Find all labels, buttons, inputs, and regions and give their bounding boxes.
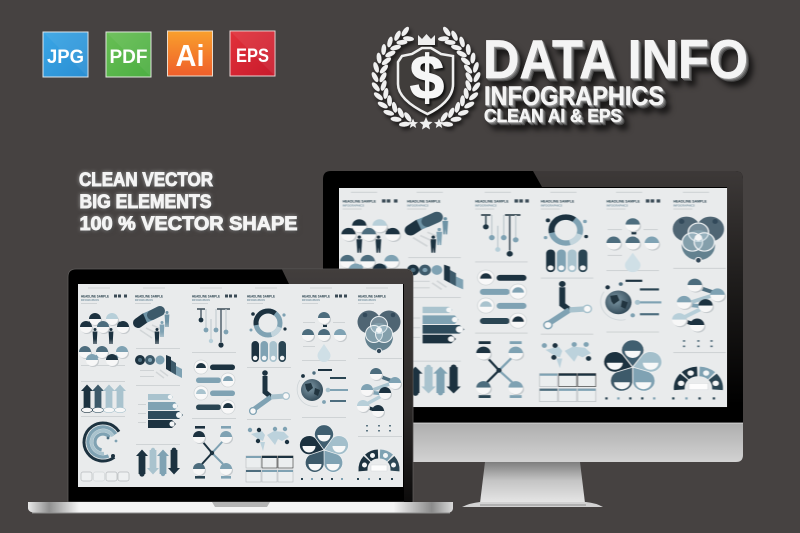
monitor	[323, 171, 743, 507]
headlines: INFOGRAPHICS	[407, 203, 429, 207]
tagline text: CLEAN VECTOR	[79, 170, 213, 191]
shield	[398, 48, 453, 114]
monitor chin	[323, 423, 743, 462]
monitor stand	[462, 462, 603, 507]
chart: tables	[540, 374, 596, 402]
monitor screen	[337, 188, 727, 407]
chart: hanging lines	[481, 215, 520, 257]
chart: cross diagram	[476, 341, 524, 398]
headlines: HEADLINE SAMPLE	[606, 200, 640, 204]
legend dots	[366, 425, 391, 432]
headlines: HEADLINE SAMPLE	[358, 294, 386, 298]
headlines: HEADLINE SAMPLE	[192, 294, 220, 298]
chart: up and down arrows	[136, 448, 180, 477]
subheading: CLEAN AI & EPS: CLEAN AI & EPS	[484, 106, 622, 126]
chart: rounded boxes	[343, 391, 400, 401]
chart: venn diagram	[358, 310, 400, 354]
chart: wave	[340, 255, 400, 278]
icon: JPG: JPG	[47, 47, 84, 68]
chart: pill rows	[194, 360, 235, 414]
chart: concentric arcs	[77, 416, 129, 468]
crown	[418, 34, 435, 45]
chart: isometric cylinders and people	[411, 217, 448, 253]
headlines	[343, 200, 707, 207]
chart: vertical pills	[252, 341, 286, 362]
headlines: INFOGRAPHICS	[673, 203, 695, 207]
icon: PDF	[106, 32, 151, 77]
chart: pill rows	[478, 270, 526, 328]
chart: circles and isometric bars	[407, 265, 463, 289]
chart: up arrows	[343, 296, 396, 327]
chart: wave	[79, 346, 129, 367]
chart: isometric cylinders and people	[138, 311, 169, 344]
chart: donut ring	[250, 308, 287, 338]
legend dots	[672, 397, 715, 399]
chart: five petals	[297, 425, 351, 476]
icon: JPG	[43, 32, 88, 77]
headlines: INFOGRAPHICS	[541, 203, 562, 207]
logo emblem	[370, 25, 482, 131]
chart: three-arm diagram	[544, 281, 591, 329]
laptop	[28, 269, 453, 513]
legend dots	[605, 397, 655, 399]
stars	[408, 117, 444, 130]
legend dots	[683, 340, 713, 347]
dollar sign: $	[410, 44, 444, 113]
chart: cross diagram	[193, 426, 233, 479]
legend dots	[357, 478, 393, 480]
lid reflection	[282, 270, 412, 502]
chart: hanging lines	[197, 309, 230, 348]
headlines: HEADLINE SAMPLE	[247, 294, 275, 298]
icon: Ai	[168, 31, 212, 76]
icon: PDF: PDF	[110, 47, 148, 68]
heading: DATA INFO: DATA INFO	[483, 28, 748, 90]
bezel reflection	[533, 171, 743, 405]
chart: wave with people	[80, 313, 130, 344]
chart: tables	[246, 456, 293, 482]
headlines: HEADLINE SAMPLE	[81, 294, 109, 298]
headlines: INFOGRAPHICS	[247, 299, 265, 302]
monitor bezel	[323, 171, 743, 423]
headlines: HEADLINE SAMPLE	[673, 200, 707, 204]
chart: globe	[601, 280, 661, 320]
chart: five petals	[601, 340, 665, 395]
chart: concentric arcs	[337, 330, 400, 387]
headlines: HEADLINE SAMPLE	[343, 200, 377, 204]
chart: wave with people	[341, 219, 401, 253]
chart: arrow banners	[423, 307, 464, 343]
legend dots	[301, 478, 343, 480]
icon: Ai: Ai	[176, 38, 204, 73]
headlines: HEADLINE SAMPLE	[302, 294, 330, 298]
laurel wreath	[370, 25, 482, 131]
chart: domes cross	[606, 218, 660, 272]
headlines: INFOGRAPHICS	[135, 299, 153, 302]
headlines: HEADLINE SAMPLE	[475, 200, 509, 204]
chart: venn diagram	[673, 217, 724, 263]
headlines: INFOGRAPHICS	[343, 203, 364, 207]
headlines: HEADLINE SAMPLE	[135, 294, 163, 298]
headlines: INFOGRAPHICS	[302, 299, 320, 302]
icon: EPS	[230, 31, 275, 76]
chart: globe	[297, 369, 348, 406]
chart: world map pins	[248, 427, 289, 451]
headlines: INFOGRAPHICS	[475, 203, 497, 207]
chart: rounded boxes	[81, 472, 129, 481]
tagline text	[79, 170, 298, 235]
chart: up and down arrows	[408, 365, 461, 396]
headlines	[81, 294, 386, 302]
tagline text: 100 % VECTOR SHAPE	[80, 214, 298, 235]
chart: world map pins	[542, 342, 591, 368]
laptop lid	[68, 269, 413, 502]
chart: three-arm diagram	[250, 370, 289, 414]
chart: domes cross	[302, 312, 347, 362]
icon: EPS: EPS	[236, 46, 269, 67]
headlines: INFOGRAPHICS	[606, 203, 628, 207]
laptop base	[28, 502, 453, 513]
headlines: HEADLINE SAMPLE	[407, 200, 441, 204]
headlines: HEADLINE SAMPLE	[541, 200, 575, 204]
format icons	[43, 31, 275, 77]
chart: half ring	[678, 370, 719, 390]
chart: vertical pills	[546, 250, 587, 272]
headlines: INFOGRAPHICS	[81, 299, 99, 302]
headlines: INFOGRAPHICS	[192, 299, 210, 302]
chart: ribbon domes	[357, 368, 402, 418]
chart: up arrows	[81, 384, 126, 413]
logo title	[483, 28, 748, 126]
laptop screen	[77, 284, 403, 487]
chart: ribbon domes	[672, 279, 726, 333]
chart: donut ring	[544, 213, 588, 247]
subheading: INFOGRAPHICS: INFOGRAPHICS	[484, 81, 664, 111]
tagline text: BIG ELEMENTS	[80, 192, 212, 213]
headlines: INFOGRAPHICS	[358, 299, 376, 302]
chart: circles and isometric bars	[135, 355, 182, 378]
chart: half ring	[362, 453, 396, 471]
chart: arrow banners	[148, 394, 183, 428]
